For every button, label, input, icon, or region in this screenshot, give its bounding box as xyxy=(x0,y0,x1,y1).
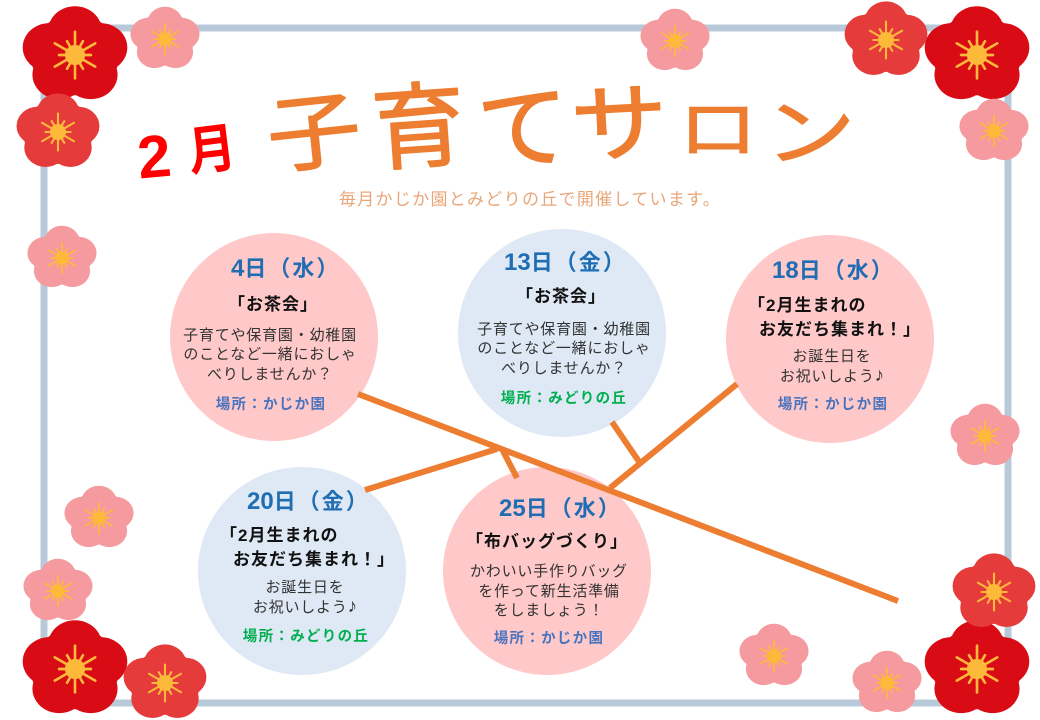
month label xyxy=(135,117,239,191)
panel: Feb 25: 25日（水） xyxy=(499,495,622,522)
panel: Feb 20: お友だち集まれ！」 xyxy=(233,550,395,569)
panel: Feb 20: お祝いしよう♪ xyxy=(253,596,357,617)
panel: Feb 18: お友だち集まれ！」 xyxy=(759,320,921,339)
title: 子 xyxy=(262,82,366,185)
month label: 月 xyxy=(184,117,239,182)
panel: Feb 4: べりしませんか？ xyxy=(207,366,333,383)
panel: Feb 20: 「2月生まれの xyxy=(220,526,338,545)
title: ロ xyxy=(678,94,758,166)
panel: Feb 13: 子育てや保育園・幼稚園 xyxy=(477,321,651,338)
panel: Feb 4: 子育てや保育園・幼稚園 xyxy=(183,327,357,344)
panel: Feb 20 xyxy=(198,467,406,675)
month label: 2 xyxy=(135,122,174,191)
title: て xyxy=(474,76,573,184)
panel: Feb 18: お祝いしよう♪ xyxy=(780,365,884,386)
panel: Feb 20: お誕生日を xyxy=(265,579,345,596)
panel: Feb 18: 場所：かじか園 xyxy=(778,396,888,413)
panel: Feb 20: 場所：みどりの丘 xyxy=(243,628,369,645)
subtitle: 毎月かじか園とみどりの丘で開催しています。 xyxy=(339,190,721,209)
panel: Feb 4: 「お茶会」 xyxy=(228,294,318,314)
title: 育 xyxy=(369,73,469,183)
panel: Feb 18: 「2月生まれの xyxy=(748,296,866,315)
panel: Feb 13: 「お茶会」 xyxy=(516,286,606,306)
panel: Feb 25: 場所：かじか園 xyxy=(494,630,604,647)
panel: Feb 25: かわいい手作りバッグ xyxy=(470,563,628,580)
connector lines xyxy=(358,384,898,601)
title: サ xyxy=(569,75,670,175)
panel: Feb 4: のことなど一緒におしゃ xyxy=(183,346,357,363)
panel: Feb 4 xyxy=(170,233,378,441)
panel: Feb 25 xyxy=(443,467,651,675)
panel: Feb 20: 20日（金） xyxy=(247,488,370,515)
panel: Feb 18: 18日（水） xyxy=(772,257,895,284)
panel: Feb 18: お誕生日を xyxy=(792,348,872,365)
panel: Feb 4: 4日（水） xyxy=(231,255,340,282)
panel: Feb 13: のことなど一緒におしゃ xyxy=(477,340,651,357)
panel: Feb 25: を作って新生活準備 xyxy=(478,583,620,600)
panel: Feb 25: 「布バッグづくり」 xyxy=(466,531,628,551)
panel: Feb 25: をしましょう！ xyxy=(494,602,604,619)
panel: Feb 4: 場所：かじか園 xyxy=(216,396,326,413)
panel: Feb 13: 13日（金） xyxy=(504,249,627,276)
title xyxy=(262,73,858,185)
panel: Feb 13: べりしませんか？ xyxy=(501,360,627,377)
panel: Feb 18 xyxy=(726,235,934,443)
title: ン xyxy=(763,90,858,175)
panel: Feb 13 xyxy=(458,229,666,437)
panel: Feb 13: 場所：みどりの丘 xyxy=(501,390,627,407)
